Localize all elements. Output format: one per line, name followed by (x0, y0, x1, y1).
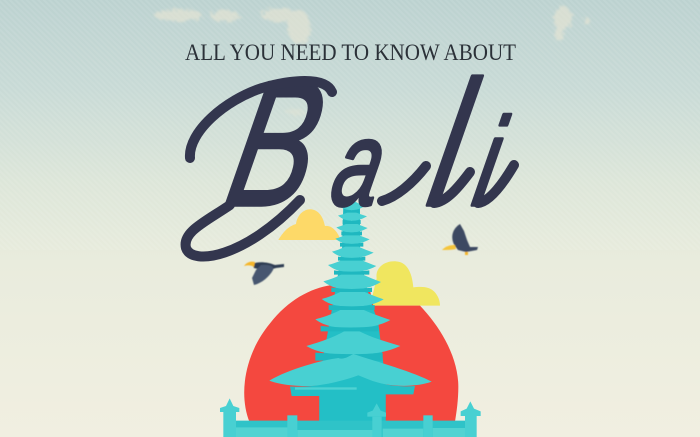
eave highlight (295, 387, 357, 390)
bird: left hornbill (244, 262, 284, 285)
temple (220, 197, 481, 437)
worn paper patches (154, 6, 590, 115)
main title: Bali: a (322, 98, 397, 231)
main roof eave (290, 375, 415, 421)
bird: right hornbill (442, 224, 478, 255)
cloud: lemon yellow (370, 261, 440, 306)
decorative flourish around title (186, 81, 514, 257)
illustration group: clouds, sun and temple (220, 197, 481, 437)
tower core (319, 203, 386, 422)
wall posts and caps (220, 398, 481, 437)
heading: ALL YOU NEED TO KNOW ABOUT (185, 40, 516, 65)
tier shadows (315, 209, 383, 361)
cloud: orange yellow (278, 209, 341, 240)
boundary wall (233, 421, 467, 437)
tier roofs (306, 197, 400, 355)
main title: Bali: i (465, 93, 516, 232)
main roof (269, 354, 432, 386)
main title: Bali: l (417, 45, 490, 244)
sun (244, 285, 458, 422)
main title: Bali: B (214, 45, 339, 244)
